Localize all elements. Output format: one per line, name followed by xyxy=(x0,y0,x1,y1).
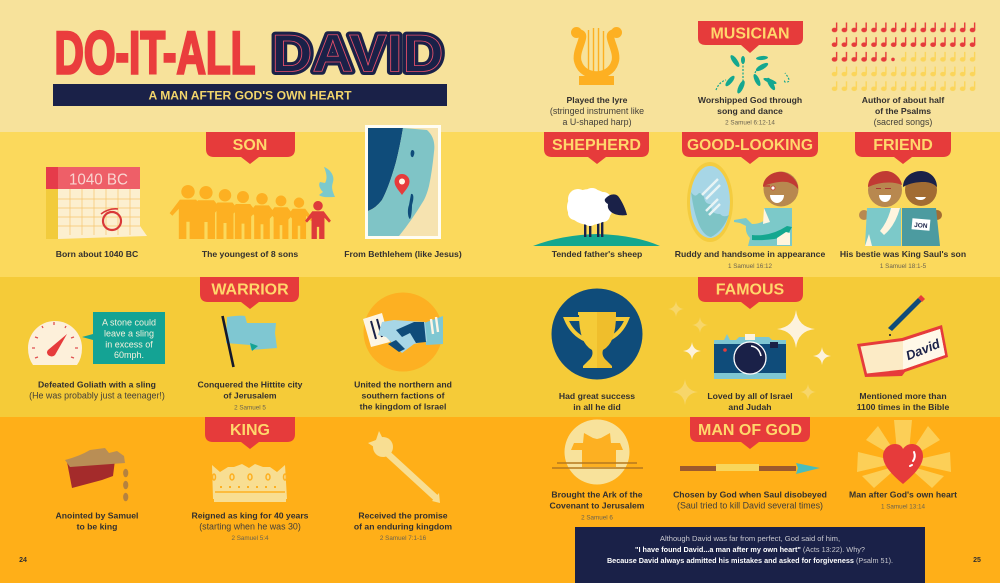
banner: king: KING xyxy=(230,422,270,439)
text: psalms caption xyxy=(862,95,944,127)
banner: friend: FRIEND xyxy=(873,137,933,154)
text: united caption: United the northern and xyxy=(354,380,452,390)
text: united caption: the kingdom of Israel xyxy=(360,402,446,412)
text: mentioned caption xyxy=(857,391,949,412)
title: DAVID xyxy=(272,24,444,84)
text: heart caption xyxy=(849,490,957,510)
text: reigned caption: 2 Samuel 5:4 xyxy=(231,535,269,542)
icon: eight brothers xyxy=(170,185,331,239)
callout: closing note: Because David always admitted his mistakes and asked for forgiveness (Psalm 51). xyxy=(607,556,893,565)
text: youngest caption: The youngest of 8 sons xyxy=(202,249,298,259)
text: promise caption: Received the promise xyxy=(358,510,448,520)
band: top cream background xyxy=(0,0,1000,132)
text: promise caption: of an enduring kingdom xyxy=(354,522,452,532)
text: Jerusalem caption xyxy=(198,380,303,412)
text: musician caption: Worshipped God through xyxy=(698,95,802,105)
icon: speedometer xyxy=(28,321,82,365)
banner: son xyxy=(206,132,295,164)
subtitle bar: A MAN AFTER GOD'S OWN HEART xyxy=(148,90,352,102)
text: friend caption: 1 Samuel 18:1-5 xyxy=(880,263,927,270)
icon: dance footprints xyxy=(716,54,789,94)
banner: shepherd: SHEPHERD xyxy=(552,137,641,154)
subtitle bar xyxy=(53,84,447,106)
icon: flag xyxy=(222,316,277,367)
icon: sheep on a hill xyxy=(533,188,660,246)
text: ark caption: Brought the Ark of the xyxy=(551,490,643,500)
text: handsome caption xyxy=(675,249,825,270)
text: Jerusalem caption: Conquered the Hittite city xyxy=(198,380,303,390)
banner: shepherd xyxy=(544,132,649,164)
text: heart caption: 1 Samuel 13:14 xyxy=(881,504,926,510)
banner: son: SON xyxy=(233,137,267,154)
text: success caption: Had great success xyxy=(559,391,635,401)
text: Goliath caption: (He was probably just a teenager!) xyxy=(29,390,165,400)
banner: musician: MUSICIAN xyxy=(710,26,790,42)
banner: man of god xyxy=(690,417,810,449)
text: born caption: Born about 1040 BC xyxy=(56,249,138,259)
icon: crown xyxy=(212,464,287,502)
text: ark caption: Covenant to Jerusalem xyxy=(550,500,645,510)
band: fourth row background xyxy=(0,417,1000,583)
text: lyre caption: Played the lyre xyxy=(567,95,628,105)
icon: handshake xyxy=(363,292,443,372)
page number 25: 25 xyxy=(973,557,981,564)
icon: arrow xyxy=(680,463,820,474)
text: Jerusalem caption: 2 Samuel 5 xyxy=(234,404,266,412)
callout: closing note xyxy=(575,527,925,583)
text: heart caption: Man after God's own heart xyxy=(849,490,957,500)
text: Goliath caption xyxy=(29,380,165,400)
text: promise caption xyxy=(354,510,452,542)
banner: good-looking: GOOD-LOOKING xyxy=(687,137,813,154)
text: musician caption: song and dance xyxy=(717,106,783,116)
title: DO-IT-ALL xyxy=(54,20,256,87)
text: psalms caption: Author of about half xyxy=(862,95,944,105)
page number 24: 24 xyxy=(19,557,27,564)
text: anointed caption: Anointed by Samuel xyxy=(56,510,138,520)
banner: man of god: MAN OF GOD xyxy=(698,422,802,439)
text: ark caption xyxy=(550,490,645,522)
text: success caption: in all he did xyxy=(573,402,621,412)
text: loved caption: and Judah xyxy=(728,402,772,412)
text: psalms caption: of the Psalms xyxy=(875,106,931,116)
banner: friend xyxy=(855,132,951,164)
callout: stone speed: 60mph. xyxy=(114,350,144,360)
text: handsome caption: Ruddy and handsome in appearance xyxy=(675,249,825,259)
text: friend caption: His bestie was King Saul's son xyxy=(840,249,966,259)
band: third row background xyxy=(0,277,1000,417)
banner: warrior: WARRIOR xyxy=(211,282,289,298)
text: musician caption: 2 Samuel 6:12-14 xyxy=(725,120,775,126)
text: ark caption: 2 Samuel 6 xyxy=(581,514,613,522)
icon: two friends: JON xyxy=(914,222,928,230)
text: loved caption: Loved by all of Israel xyxy=(707,391,793,401)
banner: king xyxy=(205,417,295,449)
callout: closing note: Although David was far from perfect, God said of him, xyxy=(660,534,840,543)
text: Jerusalem caption: of Jerusalem xyxy=(223,390,277,400)
text: Bethlehem caption: From Bethlehem (like Jesus) xyxy=(344,249,462,259)
text: reigned caption: Reigned as king for 40 years xyxy=(192,510,309,520)
text: promise caption: 2 Samuel 7:1-16 xyxy=(380,535,427,542)
callout: stone speed: in excess of xyxy=(105,340,153,350)
title: DAVID xyxy=(272,24,444,84)
banner: famous xyxy=(698,277,803,309)
text: musician caption xyxy=(698,95,802,126)
text: anointed caption xyxy=(56,510,138,532)
text: sheep caption: Tended father's sheep xyxy=(552,249,642,259)
icon: sparkles xyxy=(668,301,831,405)
text: lyre caption: (stringed instrument like xyxy=(550,106,644,116)
icon: two friends xyxy=(859,171,942,246)
text: friend caption xyxy=(840,249,966,270)
icon: lyre xyxy=(571,27,622,85)
band: second row background xyxy=(0,132,1000,277)
text: chosen caption xyxy=(673,490,827,510)
icon: calendar: 1040 BC xyxy=(69,172,128,188)
text: united caption: southern factions of xyxy=(362,390,445,400)
text: lyre caption: a U-shaped harp) xyxy=(562,117,632,127)
text: psalms caption: (sacred songs) xyxy=(874,117,932,127)
text: Goliath caption: Defeated Goliath with a sling xyxy=(38,380,156,390)
icon: calendar xyxy=(46,167,147,239)
text: lyre caption xyxy=(550,95,644,127)
banner: musician xyxy=(698,21,803,53)
icon: heart with rays xyxy=(857,420,951,488)
text: handsome caption: 1 Samuel 16:12 xyxy=(728,263,773,270)
text: anointed caption: to be king xyxy=(77,522,117,532)
banner: warrior xyxy=(200,277,299,309)
callout: closing note: "I have found David...a man after my own heart" (Acts 13:22). Why? xyxy=(635,545,865,554)
text: reigned caption xyxy=(192,510,309,542)
icon: sceptre xyxy=(368,431,440,503)
callout: stone speed: leave a sling xyxy=(104,328,154,338)
icon: mirror and boy xyxy=(687,162,798,246)
callout: stone speed: A stone could xyxy=(102,318,156,328)
icon: oil horn xyxy=(65,448,128,501)
icon: camera xyxy=(714,334,786,379)
icon: ark of the covenant xyxy=(552,420,643,484)
icon: book with David and pencil: David xyxy=(904,336,943,363)
icon: book with David and pencil xyxy=(857,295,948,377)
icon: trophy xyxy=(552,288,642,380)
text: chosen caption: (Saul tried to kill David several times) xyxy=(677,500,823,510)
icon: music notes grid xyxy=(830,20,978,94)
text: success caption xyxy=(559,391,635,412)
text: united caption xyxy=(354,380,452,412)
callout: stone speed xyxy=(82,312,165,364)
text: chosen caption: Chosen by God when Saul disobeyed xyxy=(673,490,827,500)
icon: teal arrow shape xyxy=(319,167,335,197)
text: loved caption xyxy=(707,391,793,412)
banner: famous: FAMOUS xyxy=(716,282,785,298)
text: reigned caption: (starting when he was 30) xyxy=(199,522,301,532)
text: mentioned caption: 1100 times in the Bible xyxy=(857,402,949,412)
banner: good-looking xyxy=(682,132,818,164)
text: mentioned caption: Mentioned more than xyxy=(859,391,947,401)
icon: map of Israel xyxy=(365,125,441,239)
